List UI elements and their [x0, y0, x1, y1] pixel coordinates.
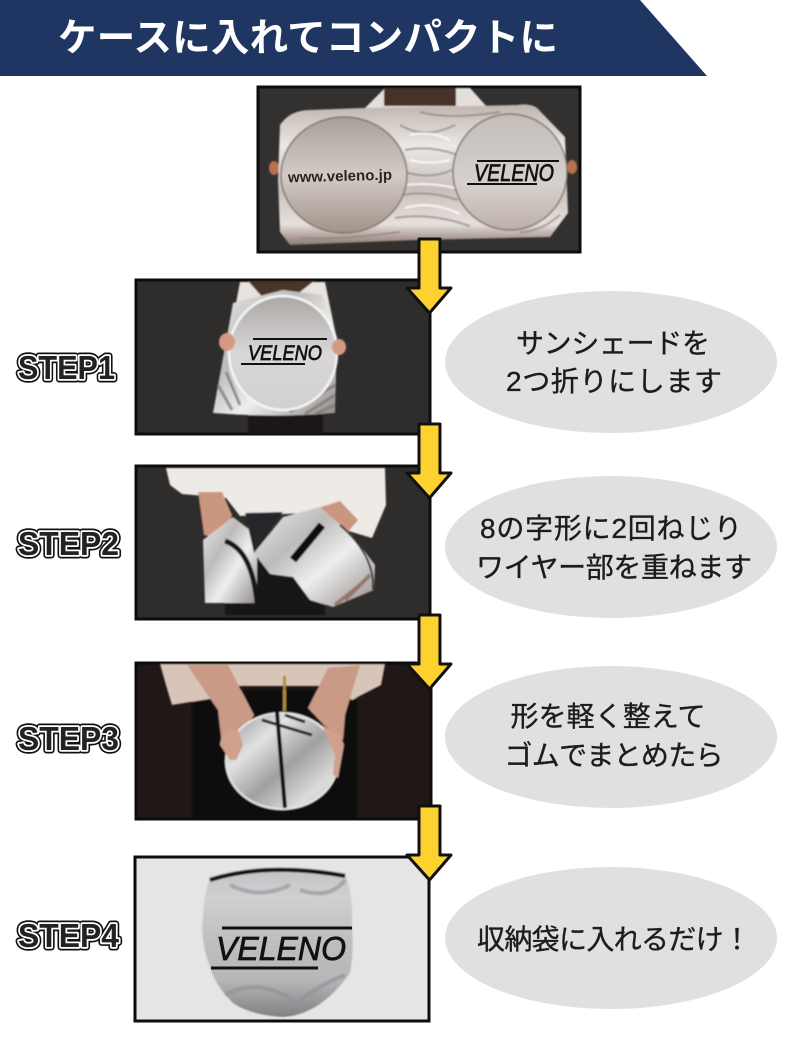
label: step 3: STEP3: [18, 720, 119, 757]
label: step 2: STEP2: [18, 525, 119, 562]
title banner: ケースに入れてコンパクトに: [58, 17, 558, 60]
callout: step 4: [445, 867, 777, 1009]
callout: step 3: 形を軽く整えて: [510, 701, 706, 732]
callout: step 3: [445, 666, 777, 808]
callout: step 2: [445, 476, 777, 618]
photo: unfolded sunshade: www.veleno.jp: [287, 167, 392, 186]
photo: step 4: [135, 857, 429, 1021]
title banner: [0, 0, 707, 76]
callout: step 1: 2つ折りにします: [506, 366, 722, 397]
photo: step 1: VELENO: [248, 342, 322, 365]
photo: unfolded sunshade: [258, 87, 580, 252]
photo: step 4: VELENO: [216, 930, 346, 967]
callout: step 2: 8の字形に2回ねじり: [480, 513, 742, 544]
callout: step 1: サンシェードを: [516, 328, 710, 359]
callout: step 4: 収納袋に入れるだけ！: [477, 924, 751, 955]
photo: step 3: [136, 663, 431, 820]
label: step 4: STEP4: [18, 917, 120, 954]
callout: step 1: [445, 291, 777, 433]
callout: step 2: ワイヤー部を重ねます: [476, 552, 752, 583]
photo: step 1: [136, 280, 430, 435]
label: step 1: STEP1: [18, 349, 115, 386]
label: step 2: STEP2: [18, 525, 119, 562]
arrow 1: [407, 239, 451, 313]
arrow 3: [407, 615, 451, 689]
label: step 4: STEP4: [18, 917, 120, 954]
arrow 2: [407, 424, 451, 498]
callout: step 3: ゴムでまとめたら: [504, 740, 724, 771]
label: step 3: STEP3: [18, 720, 119, 757]
arrow 4: [407, 806, 451, 880]
label: step 1: STEP1: [18, 349, 115, 386]
photo: step 2: [136, 466, 430, 619]
photo: unfolded sunshade: VELENO: [474, 160, 554, 187]
